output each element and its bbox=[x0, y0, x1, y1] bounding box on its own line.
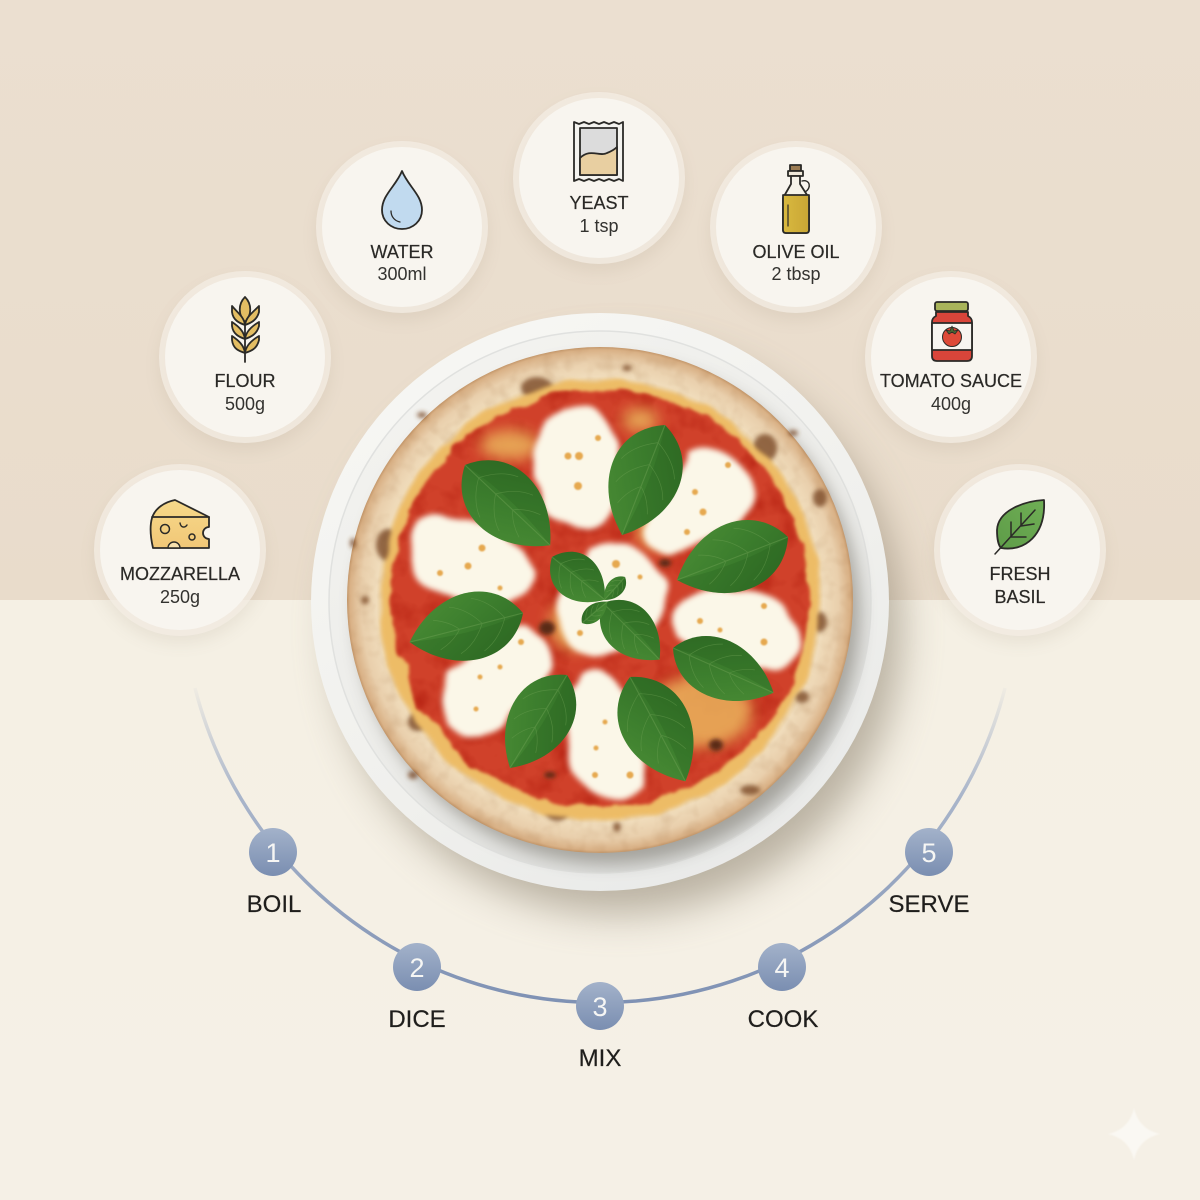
step 1: boil: BOIL bbox=[247, 891, 301, 918]
ingredient: olive oil: 2 tbsp bbox=[771, 264, 821, 284]
mozzarella patches bbox=[410, 405, 800, 797]
ingredient: fresh basil: BASIL bbox=[994, 587, 1046, 607]
icon: water drop bbox=[382, 171, 422, 229]
step 3: mix: 3 bbox=[592, 992, 608, 1022]
icon: wheat bbox=[232, 297, 259, 362]
ingredient: tomato sauce bbox=[865, 271, 1037, 451]
icon: sparkle bbox=[1108, 1108, 1160, 1160]
basil leaves bbox=[401, 412, 800, 797]
icon: yeast packet bbox=[574, 122, 623, 181]
step 5: serve: 5 bbox=[921, 838, 937, 868]
step 5: serve bbox=[889, 828, 969, 918]
ingredient: yeast: 1 tsp bbox=[579, 216, 619, 236]
orange melted patches bbox=[432, 408, 752, 748]
ingredient: mozzarella bbox=[94, 464, 266, 644]
sauce char spots bbox=[539, 559, 723, 778]
step 5: serve: SERVE bbox=[889, 891, 969, 918]
icon: olive oil bottle bbox=[783, 165, 809, 233]
ingredient: yeast bbox=[513, 92, 685, 272]
ingredient: water bbox=[316, 141, 488, 321]
ingredient: tomato sauce: 400g bbox=[931, 394, 971, 414]
ingredient: fresh basil bbox=[934, 464, 1106, 644]
golden cheese edge bbox=[380, 380, 820, 820]
step 4: cook: COOK bbox=[748, 1006, 818, 1033]
step 2: dice: 2 bbox=[409, 953, 425, 983]
icon: cheese bbox=[151, 500, 209, 548]
step 1: boil: 1 bbox=[265, 838, 281, 868]
pizza bbox=[347, 347, 853, 853]
ingredient: flour: 500g bbox=[225, 394, 265, 414]
step 4: cook bbox=[748, 943, 818, 1033]
plate with pizza bbox=[311, 313, 902, 914]
icon: tomato jar bbox=[932, 302, 972, 361]
ingredient: olive oil bbox=[710, 141, 882, 321]
pizza shadow on plate bbox=[356, 360, 860, 864]
crust bbox=[347, 347, 853, 853]
cheese browning spots bbox=[437, 435, 768, 778]
plate shadow bbox=[334, 346, 902, 914]
ingredient: fresh basil: FRESH bbox=[989, 564, 1051, 584]
ingredient: yeast: YEAST bbox=[569, 193, 629, 213]
process arc path bbox=[195, 688, 1005, 1003]
ingredient: tomato sauce: TOMATO SAUCE bbox=[880, 371, 1022, 391]
step 1: boil bbox=[247, 828, 301, 918]
ingredient: olive oil: OLIVE OIL bbox=[752, 242, 840, 262]
ingredient: flour: FLOUR bbox=[214, 371, 276, 391]
tomato sauce bbox=[391, 389, 809, 807]
step 3: mix: MIX bbox=[579, 1045, 621, 1072]
step 2: dice bbox=[388, 943, 446, 1033]
step 4: cook: 4 bbox=[774, 953, 790, 983]
background: lower cream band bbox=[0, 600, 1200, 1200]
plate bbox=[311, 313, 889, 891]
crust char marks bbox=[350, 365, 827, 832]
step 3: mix bbox=[576, 982, 624, 1072]
ingredient: mozzarella: 250g bbox=[160, 587, 200, 607]
ingredient: mozzarella: MOZZARELLA bbox=[120, 564, 240, 584]
background: upper beige band bbox=[0, 0, 1200, 600]
ingredient: flour bbox=[159, 271, 331, 451]
icon: basil leaf bbox=[995, 500, 1044, 554]
ingredient: water: 300ml bbox=[377, 264, 427, 284]
ingredient: water: WATER bbox=[370, 242, 434, 262]
step 2: dice: DICE bbox=[388, 1006, 446, 1033]
